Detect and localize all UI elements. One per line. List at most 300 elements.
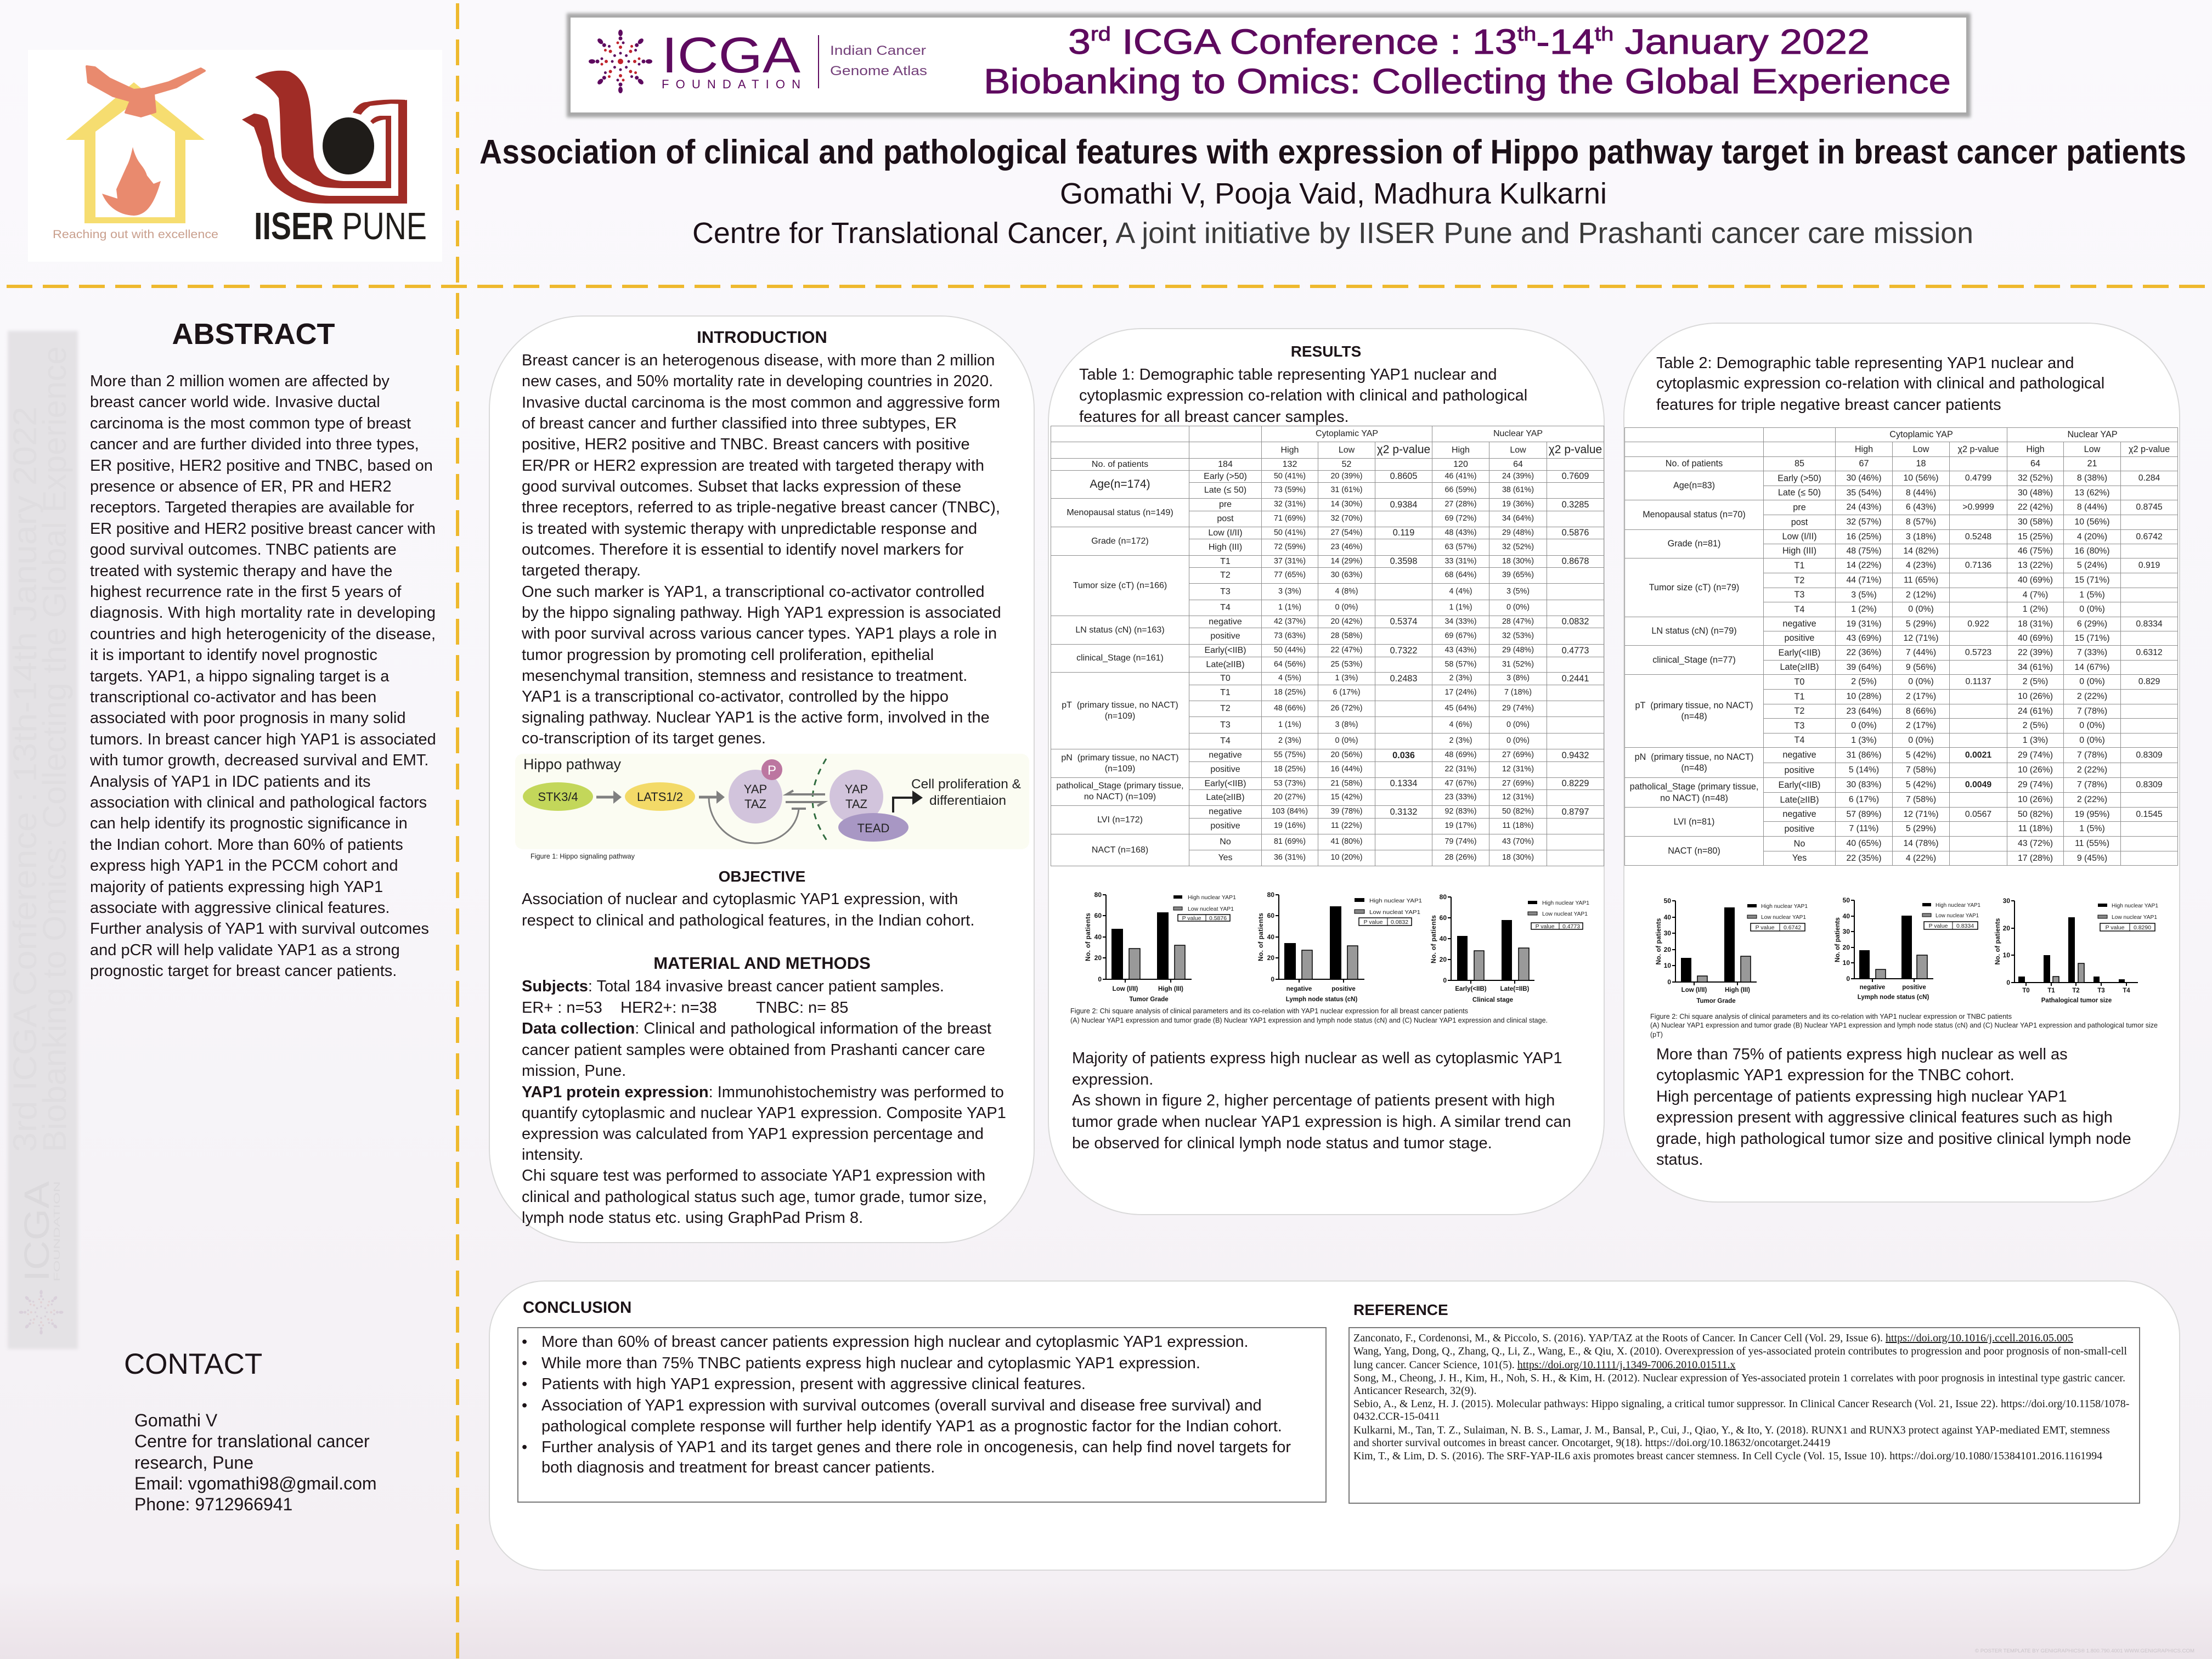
- table 1: demographic table, all patients: 12 (31%): [1502, 765, 1534, 774]
- table 2: demographic table, TNBC patients: 0.0049: [1965, 780, 1991, 789]
- table 2 caption: features for triple negative breast cancer patients: [1656, 396, 2001, 414]
- table 2: demographic table, TNBC patients: Late (≤ 50): [1778, 488, 1821, 498]
- results text: expression.: [1072, 1071, 1153, 1088]
- bar chart: TNBC lymph node status: High nuclear YAP1: [1936, 902, 1980, 909]
- table 2: demographic table, TNBC patients: 2 (12%): [1906, 590, 1936, 600]
- table 2: demographic table, TNBC patients: 10 (56%): [2074, 517, 2110, 527]
- table 2: demographic table, TNBC patients: T2: [1795, 575, 1804, 585]
- table 1: demographic table, all patients: 4 (8%): [1335, 587, 1358, 596]
- table 1: demographic table, all patients: 64 (56%): [1274, 660, 1306, 669]
- icon: IISER Pune logo: IISER PUNE: [254, 205, 427, 247]
- table 1: demographic table, all patients: 19 (17%): [1444, 821, 1477, 830]
- table 2: demographic table, TNBC patients: High: [1855, 444, 1873, 454]
- table 2: demographic table, TNBC patients: 1 (5%): [2079, 824, 2105, 833]
- bar chart: tumor grade: 20: [1094, 954, 1102, 962]
- table 2: demographic table, TNBC patients: 64: [2030, 459, 2040, 469]
- bar chart: TNBC lymph node status: Low nuclear YAP1: [1936, 912, 1979, 919]
- table 2: demographic table, TNBC patients: 40 (69%): [2018, 575, 2053, 585]
- table 1: demographic table, all patients: 23 (33%): [1444, 793, 1477, 802]
- bar chart: TNBC tumor grade: 40: [1664, 913, 1671, 921]
- table 1: demographic table, all patients: 19 (36%): [1502, 500, 1534, 509]
- bar chart: lymph node status: negative: [1286, 986, 1312, 992]
- table 1: demographic table, all patients: 20 (39%): [1330, 472, 1363, 481]
- icon: ICGA foundation logo: [589, 27, 927, 93]
- table 2: demographic table, TNBC patients: Tumor size (cT) (n=79): [1649, 583, 1739, 592]
- table 2: demographic table, TNBC patients: 7 (44%): [1906, 648, 1936, 657]
- materials and methods text: mission, Pune.: [522, 1062, 626, 1080]
- table 2: demographic table, TNBC patients: 6 (17%): [1849, 795, 1879, 804]
- table 1: demographic table, all patients: 69 (67%): [1444, 631, 1477, 640]
- table 1: demographic table, all patients: 20 (56%): [1330, 751, 1363, 759]
- table 1: demographic table, all patients: 0 (0%): [1335, 603, 1358, 612]
- table 2: demographic table, TNBC patients: 57 (89%): [1846, 810, 1882, 819]
- abstract text: majority of patients expressing high YAP1: [90, 878, 383, 896]
- table 2: demographic table, TNBC patients: positive: [1785, 824, 1814, 834]
- table 1: demographic table, all patients: 46 (41%): [1444, 472, 1477, 481]
- table 2: demographic table, TNBC patients: 12 (71%): [1903, 810, 1939, 819]
- table 1: demographic table, all patients: 34 (64%): [1502, 514, 1534, 523]
- table 2: demographic table, TNBC patients: 21: [2087, 459, 2097, 469]
- conclusion list: pathological complete response will further help identify YAP1 as a prognostic factor for the Indian cohort.: [541, 1418, 1282, 1435]
- introduction text: tumor progression by promoting cell proliferation, epithelial: [522, 646, 934, 664]
- TNBC results text: More than 75% of patients express high nuclear as well as: [1656, 1046, 2068, 1063]
- table 2: demographic table, TNBC patients: 2 (22%): [2077, 765, 2107, 775]
- figure 1: Hippo pathway diagram: Figure 1: Hippo signaling pathway: [531, 853, 635, 860]
- table 1: demographic table, all patients: pN (primary tissue, no NACT): [1061, 753, 1179, 763]
- table 1: demographic table, all patients: 71 (69%): [1274, 514, 1306, 523]
- table 2: demographic table, TNBC patients: 18 (31%): [2018, 619, 2053, 629]
- table 2: demographic table, TNBC patients: T1: [1795, 561, 1804, 571]
- bar chart: lymph node status: 60: [1267, 912, 1274, 919]
- table 1: demographic table, all patients: Menopausal status (n=149): [1066, 508, 1173, 517]
- table 2: demographic table, TNBC patients: 13 (62%): [2074, 488, 2110, 498]
- table 1: demographic table, all patients: Late (≤ 50): [1204, 486, 1246, 495]
- materials and methods text: Subjects: Total 184 invasive breast cancer patient samples.: [522, 978, 944, 995]
- bar chart: TNBC lymph node status: 20: [1843, 944, 1850, 951]
- table 1: demographic table, all patients: 73 (63%): [1274, 631, 1306, 640]
- table 1 caption: features for all breast cancer samples.: [1079, 408, 1349, 426]
- table 1: demographic table, all patients: 28 (58%): [1330, 631, 1363, 640]
- table 1: demographic table, all patients: Early(<IIB): [1204, 779, 1246, 788]
- table 2: demographic table, TNBC patients: 40 (69%): [2018, 634, 2053, 643]
- materials and methods text: YAP1 protein expression: Immunohistochemistry was performed to: [522, 1084, 1004, 1101]
- bar chart: clinical stage: Clinical stage: [1472, 997, 1513, 1003]
- table 2: demographic table, TNBC patients: Low: [2084, 444, 2100, 454]
- materials and methods text: Data collection: Clinical and pathological information of the breast: [522, 1020, 991, 1037]
- table 1: demographic table, all patients: 77 (65%): [1274, 571, 1306, 579]
- reference list: Zanconato, F., Cordenonsi, M., & Piccolo, S. (2016). YAP/TAZ at the Roots of Cancer. In Cancer Cell (Vol. 29, Issue 6). https://doi.org/10.1016/j.ccell.2016.05.005: [1353, 1332, 2073, 1344]
- contact block: [124, 1348, 377, 1514]
- table 1: demographic table, all patients: 39 (78%): [1330, 807, 1363, 816]
- table 2: demographic table, TNBC patients: T3: [1795, 721, 1804, 731]
- table 1: demographic table, all patients: 6 (17%): [1333, 688, 1361, 697]
- table 1: demographic table, all patients: 48 (43%): [1444, 528, 1477, 537]
- abstract text: [89, 373, 436, 980]
- table 2: demographic table, TNBC patients: no NACT) (n=48): [1660, 793, 1728, 803]
- bar chart: tumor grade: No. of patients: [1084, 913, 1092, 961]
- introduction text: signaling pathway. Nuclear YAP1 is the active form, involved in the: [522, 709, 990, 726]
- table 1: demographic table, all patients: 45 (64%): [1444, 704, 1477, 713]
- introduction text: YAP1 is a transcriptional co-activator, controlled by the hippo: [522, 688, 949, 706]
- table 1: demographic table, all patients: 18 (25%): [1274, 688, 1306, 697]
- table 1: demographic table, all patients: 0.3598: [1390, 556, 1417, 566]
- sidebar watermark strip: Biobanking to Omics: Collecting the Global Experience: [36, 346, 73, 1152]
- table 2: demographic table, TNBC patients: 3 (5%): [1851, 590, 1877, 600]
- table 2: demographic table, TNBC patients: 7 (11%): [1849, 824, 1879, 833]
- table 2: demographic table, TNBC patients: 7 (33%): [2077, 648, 2107, 657]
- table 1: demographic table, all patients: 55 (75%): [1274, 751, 1306, 759]
- table 1: demographic table, all patients: 3 (3%): [1278, 587, 1301, 596]
- table 2: demographic table, TNBC patients: 5 (24%): [2077, 561, 2107, 570]
- table 1: demographic table, all patients: χ2 p-value: [1377, 443, 1430, 456]
- table 1: demographic table, all patients: Low (I/II): [1208, 528, 1243, 538]
- table 1: demographic table, all patients: 0.9384: [1390, 500, 1417, 510]
- table 2: demographic table, TNBC patients: 17 (28%): [2018, 854, 2053, 863]
- table 2: demographic table, TNBC patients: 16 (25%): [1846, 532, 1882, 541]
- conference title line 1: ICGA Conference : 13: [1111, 22, 1517, 61]
- panel: introduction, objective, methods: [489, 316, 1034, 1243]
- abstract text: associate with aggressive clinical features.: [90, 899, 390, 917]
- bar chart: TNBC pathological tumor size: T0: [2022, 988, 2030, 994]
- reference list: Sebio, A., & Lenz, H. J. (2015). Molecular pathways: Hippo signaling, a critical tumor suppressor. In Clinical Cancer Research (Vol. 21, Issue 22). https://doi.org/10.1158/1078-: [1353, 1398, 2129, 1410]
- table 1: demographic table, all patients: Yes: [1218, 853, 1233, 862]
- table 2: demographic table, TNBC patients: 0 (0%): [1851, 721, 1877, 730]
- table 1: demographic table, all patients: 23 (46%): [1330, 543, 1363, 551]
- table 1: demographic table, all patients: positive: [1210, 631, 1240, 641]
- abstract text: tumors. In breast cancer high YAP1 is associated: [90, 731, 436, 748]
- figure 2 caption, TNBC: (pT): [1650, 1031, 1663, 1039]
- table 1: demographic table, all patients: 81 (69%): [1274, 837, 1306, 846]
- materials and methods text: [522, 978, 1006, 1227]
- table 2: demographic table, TNBC patients: (n=48): [1681, 712, 1707, 721]
- table 1: demographic table, all patients: (n=109): [1105, 764, 1135, 774]
- table 2: demographic table, TNBC patients: 43 (72%): [2018, 839, 2053, 848]
- introduction text: good survival outcomes. Subset that lacks expression of these: [522, 478, 961, 495]
- table 2: demographic table, TNBC patients: 23 (64%): [1846, 707, 1882, 716]
- table 2: demographic table, TNBC patients: T4: [1795, 605, 1804, 614]
- table 2: demographic table, TNBC patients: 0.8745: [2136, 503, 2163, 512]
- table 1: demographic table, all patients: 1 (3%): [1335, 674, 1358, 682]
- figure 1: Hippo pathway diagram: LATS1/2: [637, 790, 683, 804]
- table 2: demographic table, TNBC patients: 0.922: [1967, 619, 1989, 629]
- table 2: demographic table, TNBC patients: 5 (29%): [1906, 824, 1936, 833]
- bar chart: TNBC tumor grade: Low (I/II): [1681, 987, 1707, 994]
- bar chart: clinical stage: Early(<IIB): [1455, 986, 1487, 992]
- table 2: demographic table, TNBC patients: 0 (0%): [2079, 736, 2105, 745]
- table 1: demographic table, all patients: T4: [1220, 603, 1231, 612]
- bar chart: clinical stage: 0: [1443, 977, 1447, 984]
- table 2: demographic table, TNBC patients: T2: [1795, 706, 1804, 716]
- conference title line 2: Biobanking to Omics: Collecting the Global Experience: [984, 61, 1951, 101]
- table 1: demographic table, all patients: 37 (31%): [1274, 557, 1306, 566]
- table 1: demographic table, all patients: 21 (58%): [1330, 779, 1363, 788]
- table 2: demographic table, TNBC patients: 2 (17%): [1906, 692, 1936, 701]
- introduction text: mesenchymal transition, stemness and resistance to treatment.: [522, 667, 967, 685]
- table 1: demographic table, all patients: T1: [1220, 556, 1231, 566]
- table 2: demographic table, TNBC patients: 11 (18%): [2018, 824, 2053, 833]
- figure 1: Hippo pathway diagram: P: [768, 763, 776, 778]
- panel: results table 2: [1624, 323, 2180, 1202]
- abstract text: express high YAP1 in the PCCM cohort and: [90, 857, 398, 874]
- table 1: demographic table, all patients: 26 (72%): [1330, 704, 1363, 713]
- bar chart: lymph node status: 80: [1267, 891, 1274, 899]
- materials and methods text: cancer patient samples were obtained from Prashanti cancer care: [522, 1041, 985, 1059]
- table 2: demographic table, TNBC patients: Age(n=83): [1673, 481, 1715, 490]
- table 2: demographic table, TNBC patients: 1 (5%): [2079, 590, 2105, 600]
- table 2: demographic table, TNBC patients: 9 (56%): [1906, 663, 1936, 672]
- table 1: demographic table, all patients: 0.036: [1392, 751, 1415, 760]
- bar chart: TNBC lymph node status: 30: [1843, 928, 1850, 935]
- table 1: demographic table, all patients: 42 (37%): [1274, 617, 1306, 626]
- bar chart: TNBC lymph node status: 10: [1843, 959, 1850, 967]
- table 1: demographic table, all patients: 14 (30%): [1330, 500, 1363, 509]
- table 2: demographic table, TNBC patients: 29 (74%): [2018, 780, 2053, 789]
- table 1: demographic table, all patients: 30 (63%): [1330, 571, 1363, 579]
- table 1: demographic table, all patients: 132: [1283, 460, 1297, 469]
- table 1: demographic table, all patients: 31 (52%): [1502, 660, 1534, 669]
- table 2: demographic table, TNBC patients: High: [2026, 444, 2045, 454]
- TNBC results text: grade, high pathological tumor size and positive clinical lymph node: [1656, 1130, 2131, 1148]
- table 1: demographic table, all patients: 47 (67%): [1444, 779, 1477, 788]
- table 1: demographic table, all patients: 0 (0%): [1335, 736, 1358, 745]
- table 1: demographic table, all patients: 0 (0%): [1506, 720, 1530, 729]
- conclusion list: Association of YAP1 expression with survival outcomes (overall survival and disease free survival) and: [541, 1397, 1262, 1414]
- figure 2 caption, TNBC: (A) Nuclear YAP1 expression and tumor grade (B) Nuclear YAP1 expression and lymph node status (cN) and (C) Nuclear YAP1 expression and pathological tumor size: [1650, 1022, 2158, 1029]
- table 2: demographic table, TNBC patients: 16 (80%): [2074, 546, 2110, 556]
- panel: results table 1: [1048, 329, 1604, 1215]
- contact block: research, Pune: [134, 1453, 253, 1472]
- bar chart: TNBC pathological tumor size: 10: [2003, 951, 2010, 959]
- table 2: demographic table, TNBC patients: 0.4799: [1965, 473, 1991, 483]
- icon: ICGA foundation logo: Indian Cancer: [830, 43, 926, 58]
- table 2: demographic table, TNBC patients: 0.1137: [1965, 677, 1991, 686]
- reference list: Anticancer Research, 32(9).: [1353, 1385, 1476, 1397]
- table 1: demographic table, all patients: 32 (31%): [1274, 500, 1306, 509]
- table 2: demographic table, TNBC patients: T3: [1795, 590, 1804, 600]
- introduction heading: INTRODUCTION: [697, 328, 827, 347]
- table 1: demographic table, all patients: Early (>50): [1204, 472, 1247, 481]
- table 1: demographic table, all patients: 10 (20%): [1330, 853, 1363, 862]
- abstract text: treated with systemic therapy and have the: [90, 562, 392, 580]
- materials and methods text: Chi square test was performed to associate YAP1 expression with: [522, 1167, 985, 1184]
- bar chart: TNBC tumor grade: 50: [1664, 897, 1671, 905]
- materials and methods text: HER2+: n=38: [620, 999, 717, 1017]
- table 2: demographic table, TNBC patients: 8 (44%): [2077, 503, 2107, 512]
- bar chart: clinical stage: High nuclear YAP1: [1542, 900, 1589, 906]
- table 2: demographic table, TNBC patients: 1 (2%): [1851, 605, 1877, 614]
- bar chart: TNBC lymph node status: 50: [1843, 896, 1850, 904]
- table 1: demographic table, all patients: 92 (83%): [1444, 807, 1477, 816]
- table 2: demographic table, TNBC patients: Low (I/II): [1782, 532, 1816, 541]
- table 2: demographic table, TNBC patients: patholical_Stage (primary tissue,: [1630, 782, 1758, 792]
- figure 1: Hippo pathway diagram: [515, 754, 1029, 860]
- table 2: demographic table, TNBC patients: 2 (5%): [2023, 721, 2048, 730]
- table 2: demographic table, TNBC patients: 1 (3%): [1851, 736, 1877, 745]
- TNBC results text: cytoplasmic YAP1 expression for the TNBC cohort.: [1656, 1066, 2015, 1084]
- conference title line 1: th: [1595, 22, 1613, 45]
- abstract text: More than 2 million women are affected by: [90, 373, 390, 390]
- abstract text: presence or absence of ER, PR and HER2: [90, 478, 392, 495]
- figure 1: Hippo pathway diagram: TEAD: [857, 821, 889, 835]
- table 2: demographic table, TNBC patients: 85: [1795, 459, 1804, 469]
- objective text: respect to clinical and pathological features, in the Indian cohort.: [522, 912, 974, 929]
- bar chart: TNBC pathological tumor size: Low nuclear YAP1: [2112, 914, 2157, 921]
- reference list: Kulkarni, M., Tan, T. Z., Sulaiman, N. B. S., Lamar, J. M., Bansal, P., Cui, J., Qiao, Y., & Ito, Y. (2018). RUNX1 and RUNX3 protect against YAP-mediated EMT, stemness: [1353, 1424, 2110, 1436]
- table 1: demographic table, all patients: 29 (48%): [1502, 528, 1534, 537]
- bar chart: TNBC pathological tumor size: 0.8290: [2134, 924, 2151, 931]
- abstract text: diagnosis. With high mortality rate in developing: [90, 604, 436, 622]
- table 2: demographic table, TNBC patients: 15 (25%): [2018, 532, 2053, 541]
- table 1: demographic table, all patients: 1 (1%): [1449, 603, 1472, 612]
- conclusion list: •: [522, 1397, 527, 1414]
- table 2: demographic table, TNBC patients: 29 (74%): [2018, 751, 2053, 760]
- table 1: demographic table, all patients: 0.2483: [1390, 674, 1417, 684]
- table 2: demographic table, TNBC patients: 8 (38%): [2077, 473, 2107, 483]
- table 1: demographic table, all patients: LN status (cN) (n=163): [1075, 625, 1165, 634]
- table 1: demographic table, all patients: 0.4773: [1562, 646, 1589, 656]
- abstract text: targets. YAP1, a hippo signaling target is a: [90, 668, 390, 685]
- table 2: demographic table, TNBC patients: 0.0567: [1965, 810, 1991, 819]
- table 2: demographic table, TNBC patients: 22 (36%): [1846, 648, 1882, 657]
- table 1: demographic table, all patients: 20 (27%): [1274, 793, 1306, 802]
- introduction text: [521, 352, 1001, 747]
- table 2: demographic table, TNBC patients: 15 (71%): [2074, 575, 2110, 585]
- bar chart: tumor grade: 60: [1094, 912, 1102, 919]
- table 2: demographic table, TNBC patients: [1624, 427, 2178, 866]
- abstract text: good survival outcomes. TNBC patients are: [90, 541, 397, 558]
- table 1: demographic table, all patients: LVI (n=172): [1097, 815, 1143, 824]
- table 2: demographic table, TNBC patients: 46 (75%): [2018, 546, 2053, 556]
- bar chart: lymph node status: High nuclear YAP1: [1369, 898, 1422, 904]
- conclusion list: While more than 75% TNBC patients express high nuclear and cytoplasmic YAP1 expression.: [541, 1355, 1200, 1372]
- conclusion list: Patients with high YAP1 expression, present with aggressive clinical features.: [541, 1375, 1086, 1393]
- table 1: demographic table, all patients: 184: [1218, 460, 1233, 469]
- table 1: demographic table, all patients: clinical_Stage (n=161): [1076, 653, 1164, 663]
- abstract text: with tumor growth, decreased survival and EMT.: [89, 752, 428, 769]
- table 1: demographic table, all patients: T2: [1220, 704, 1231, 713]
- table 1: demographic table, all patients: 4 (5%): [1278, 674, 1301, 682]
- table 2: demographic table, TNBC patients: 14 (82%): [1903, 546, 1939, 556]
- abstract text: breast cancer world wide. Invasive ductal: [90, 393, 380, 411]
- introduction text: outcomes. Therefore it is essential to identify novel markers for: [522, 541, 964, 558]
- table 2: demographic table, TNBC patients: No: [1794, 839, 1805, 849]
- bar chart: TNBC pathological tumor size: T1: [2047, 988, 2055, 994]
- table 2: demographic table, TNBC patients: 1 (3%): [2023, 736, 2048, 745]
- table 2: demographic table, TNBC patients: 0.829: [2138, 677, 2160, 686]
- table 1: demographic table, all patients: High: [1452, 445, 1470, 454]
- table 2: demographic table, TNBC patients: 0 (0%): [2079, 721, 2105, 730]
- table 2: demographic table, TNBC patients: 44 (71%): [1846, 575, 1882, 585]
- bar chart: clinical stage: No. of patients: [1430, 915, 1437, 963]
- table 1: demographic table, all patients: negative: [1209, 751, 1242, 760]
- table 2: demographic table, TNBC patients: 34 (61%): [2018, 663, 2053, 672]
- bar chart: TNBC pathological tumor size: High nuclear YAP1: [2112, 902, 2158, 909]
- bar chart: TNBC lymph node status: P value: [1929, 923, 1948, 929]
- bar chart: TNBC lymph node status: 0: [1846, 975, 1850, 983]
- table 1: demographic table, all patients: pre: [1219, 500, 1232, 509]
- template credit: © POSTER TEMPLATE BY GENIGRAPHICS® 1.800.790.4001 WWW.GENIGRAPHICS.COM: [1975, 1648, 2194, 1654]
- introduction text: by the hippo signaling pathway. High YAP1 expression is associated: [522, 604, 1001, 622]
- bar chart: tumor grade: Tumor Grade: [1129, 996, 1169, 1003]
- contact block: Phone: 9712966941: [134, 1494, 292, 1514]
- results text: tumor grade when nuclear YAP1 expression is high. A similar trend can: [1072, 1113, 1571, 1131]
- table 2: demographic table, TNBC patients: Menopausal status (n=70): [1643, 510, 1746, 520]
- table 1: demographic table, all patients: no NACT) (n=109): [1084, 792, 1156, 802]
- bar chart: TNBC pathological tumor size: Pathalogical tumor size: [2041, 997, 2112, 1004]
- bar chart: TNBC tumor grade: 0: [1667, 978, 1671, 986]
- introduction text: One such marker is YAP1, a transcriptional co-activator controlled: [522, 583, 985, 601]
- table 2: demographic table, TNBC patients: 5 (29%): [1906, 619, 1936, 629]
- bar chart: TNBC lymph node status: 40: [1843, 912, 1850, 920]
- table 1: demographic table, all patients: pT (primary tissue, no NACT): [1062, 700, 1178, 710]
- table 1: demographic table, all patients: 3 (8%): [1506, 674, 1530, 682]
- objective text: Association of nuclear and cytoplasmic YAP1 expression, with: [522, 890, 958, 908]
- bar chart: TNBC pathological tumor size: [1994, 897, 2158, 1004]
- table 2: demographic table, TNBC patients: 19 (95%): [2074, 810, 2110, 819]
- introduction text: with poor survival across various cancer types. YAP1 plays a role in: [521, 625, 997, 642]
- abstract text: receptors. Targeted therapies are available for: [90, 499, 414, 516]
- table 1: demographic table, all patients: 16 (44%): [1330, 765, 1363, 774]
- conclusion list: •: [522, 1375, 527, 1393]
- results text: Majority of patients express high nuclear as well as cytoplasmic YAP1: [1072, 1049, 1562, 1067]
- materials and methods text: quantify cytoplasmic and nuclear YAP1 expression. Composite YAP1: [522, 1104, 1006, 1122]
- figure 1: Hippo pathway diagram: Cell proliferation &: [911, 777, 1021, 792]
- bar chart: TNBC pathological tumor size: 30: [2003, 897, 2010, 905]
- figure 2 caption, all patients: Figure 2: Chi square analysis of clinical parameters and its co-relation with YAP1 nuclear expression for all breast cancer patients: [1070, 1007, 1468, 1015]
- conference title line 1: 3: [1068, 22, 1088, 61]
- table 2: demographic table, TNBC patients: 50 (82%): [2018, 810, 2053, 819]
- bar chart: lymph node status: 40: [1267, 933, 1274, 941]
- results heading: RESULTS: [1291, 343, 1361, 360]
- table 2: demographic table, TNBC patients: 0.8309: [2136, 780, 2163, 789]
- conclusion list: •: [522, 1355, 527, 1372]
- table 1: demographic table, all patients: 0.8678: [1562, 556, 1589, 566]
- table 1: demographic table, all patients: 27 (28%): [1444, 500, 1477, 509]
- table 1: demographic table, all patients: 58 (57%): [1444, 660, 1477, 669]
- partner logos: [28, 50, 442, 262]
- reference heading: REFERENCE: [1353, 1301, 1448, 1318]
- table 1: demographic table, all patients: 28 (26%): [1444, 853, 1477, 862]
- results text: As shown in figure 2, higher percentage of patients present with high: [1072, 1092, 1555, 1109]
- table 1: demographic table, all patients: 2 (3%): [1449, 674, 1472, 682]
- table 1: demographic table, all patients: T0: [1220, 674, 1231, 683]
- table 2: demographic table, TNBC patients: 10 (28%): [1846, 692, 1882, 701]
- table 1: demographic table, all patients: 0.2441: [1562, 674, 1589, 684]
- table 1: demographic table, all patients: Low: [1510, 445, 1526, 454]
- table 1: demographic table, all patients: 39 (65%): [1502, 571, 1534, 579]
- table 2: demographic table, TNBC patients: 0.1545: [2136, 810, 2163, 819]
- materials and methods text: clinical and pathological status such age, tumor grade, tumor size,: [522, 1188, 987, 1206]
- abstract text: transcriptional co-activator and has been: [90, 689, 376, 706]
- figure 1: Hippo pathway diagram: TAZ: [744, 797, 766, 811]
- table 2: demographic table, TNBC patients: LN status (cN) (n=79): [1651, 626, 1737, 636]
- table 2: demographic table, TNBC patients: 48 (75%): [1846, 546, 1882, 556]
- table 1: demographic table, all patients: 0.8229: [1562, 778, 1589, 788]
- table 1: demographic table, all patients: Cytoplamic YAP: [1316, 429, 1378, 438]
- table 1: demographic table, all patients: 3 (8%): [1335, 720, 1358, 729]
- table 1: demographic table, all patients: 0.119: [1393, 528, 1414, 538]
- table 2: demographic table, TNBC patients: 10 (56%): [1903, 473, 1939, 483]
- sidebar watermark strip: ICGA: [17, 1181, 57, 1282]
- table 1: demographic table, all patients: 66 (59%): [1444, 486, 1477, 494]
- table 2: demographic table, TNBC patients: 0.5248: [1965, 532, 1991, 541]
- abstract text: associated with poor prognosis in many solid: [90, 709, 405, 727]
- table 2: demographic table, TNBC patients: Low: [1913, 444, 1929, 454]
- table 2: demographic table, TNBC patients: 0.919: [2138, 561, 2160, 570]
- TNBC results text: [1656, 1046, 2131, 1169]
- table 2: demographic table, TNBC patients: 12 (71%): [1903, 634, 1939, 643]
- table 2: demographic table, TNBC patients: 0.7136: [1965, 561, 1991, 570]
